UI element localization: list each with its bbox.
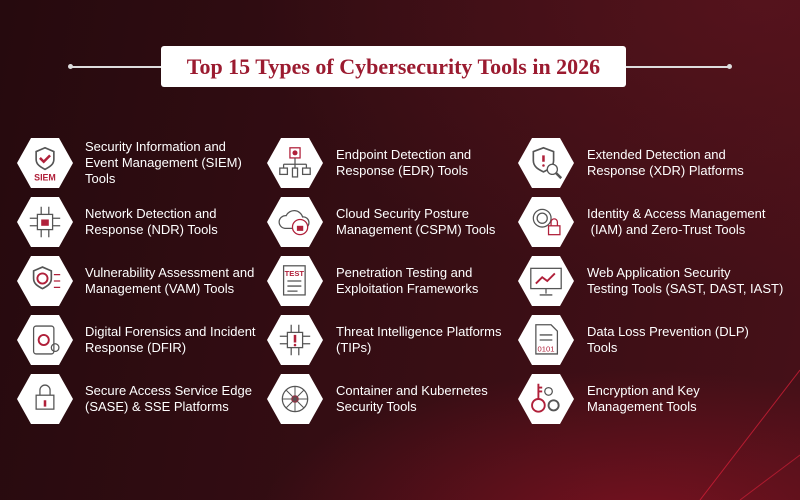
item: CSPM: Management (CSPM) Tools <box>336 222 495 237</box>
item: Container <box>267 374 488 424</box>
item: SASE <box>17 374 252 424</box>
item: IAM <box>518 197 766 247</box>
item: XDR: Extended Detection and <box>587 147 726 162</box>
title line right <box>626 66 730 68</box>
item: Container: Security Tools <box>336 399 417 414</box>
item: Container: Container and Kubernetes <box>336 383 488 398</box>
item: Pen testing: TEST <box>285 269 304 278</box>
item: Web App: Testing Tools (SAST, DAST, IAST) <box>587 281 783 296</box>
item: SIEM <box>17 138 242 188</box>
item: NDR: Network Detection and <box>85 206 217 221</box>
item: Pen testing <box>267 256 478 306</box>
item: SIEM: Tools <box>85 171 115 186</box>
item: Encryption <box>518 374 700 424</box>
item: Web App: Web Application Security <box>587 265 731 280</box>
item: VAM: Vulnerability Assessment and <box>85 265 254 280</box>
item: VAM <box>17 256 254 306</box>
item: NDR <box>17 197 218 247</box>
item: EDR <box>267 138 471 188</box>
item: EDR: Response (EDR) Tools <box>336 163 468 178</box>
item: IAM: Identity & Access Management <box>587 206 765 221</box>
title line left <box>70 66 162 68</box>
item: SASE: (SASE) & SSE Platforms <box>85 399 229 414</box>
item: SASE: Secure Access Service Edge <box>85 383 252 398</box>
item: DLP <box>518 315 749 365</box>
item: CSPM: Cloud Security Posture <box>336 206 469 221</box>
item: Web App <box>518 256 783 306</box>
item: TIP: Threat Intelligence Platforms <box>336 324 501 339</box>
icon: SIEM shield <box>17 138 73 188</box>
item: DLP: 0101 <box>538 344 554 353</box>
item: Pen testing: Penetration Testing and <box>336 265 472 280</box>
item: Encryption: Management Tools <box>587 399 697 414</box>
item: XDR <box>518 138 744 188</box>
item: DFIR <box>17 315 256 365</box>
item: DFIR: Digital Forensics and Incident <box>85 324 256 339</box>
item: TIP <box>267 315 501 365</box>
item: SIEM: Event Management (SIEM) <box>85 155 242 170</box>
item: DLP: Data Loss Prevention (DLP) <box>587 324 749 339</box>
item: DFIR: Response (DFIR) <box>85 340 186 355</box>
item: VAM: Management (VAM) Tools <box>85 281 234 296</box>
item: Encryption: Encryption and Key <box>587 383 700 398</box>
item: IAM: (IAM) and Zero-Trust Tools <box>591 222 745 237</box>
item: XDR: Response (XDR) Platforms <box>587 163 744 178</box>
title <box>161 46 626 87</box>
item: DLP: Tools <box>587 340 617 355</box>
item: SIEM: Security Information and <box>85 139 226 154</box>
item: CSPM <box>267 197 495 247</box>
item: Pen testing: Exploitation Frameworks <box>336 281 478 296</box>
item: TIP: (TIPs) <box>336 340 371 355</box>
title: Top 15 Types of Cybersecurity Tools in 2026 <box>187 54 600 78</box>
item: NDR: Response (NDR) Tools <box>85 222 218 237</box>
item: EDR: Endpoint Detection and <box>336 147 471 162</box>
